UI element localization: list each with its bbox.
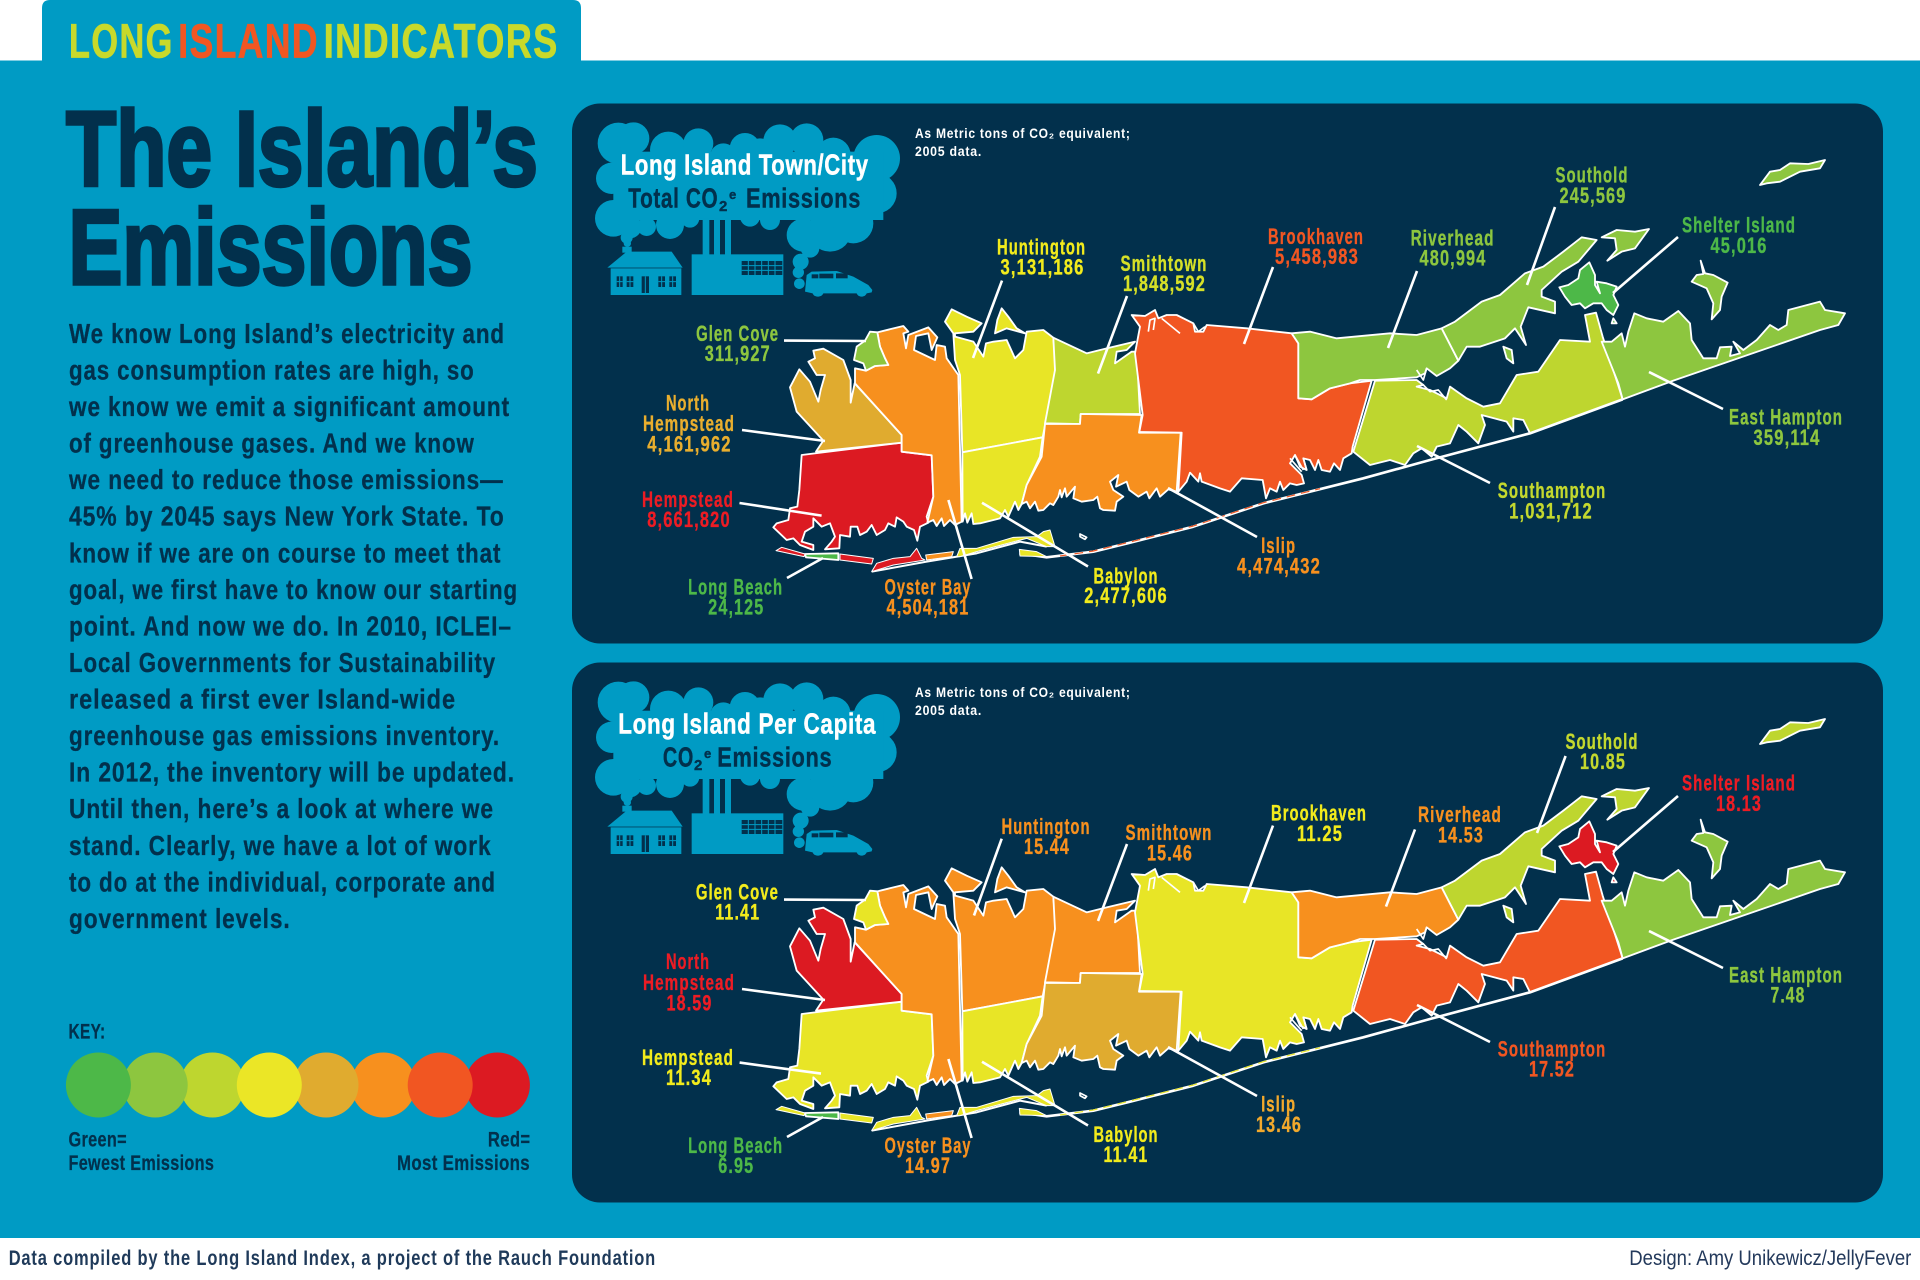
region: East Hampton bbox=[1602, 820, 1845, 958]
label: Long Beach bbox=[688, 1117, 823, 1178]
label: Hempstead: Hempstead bbox=[642, 1045, 734, 1070]
label: Hempstead bbox=[642, 1045, 821, 1090]
key: Fewest Emissions bbox=[68, 1151, 214, 1175]
label: Long Beach: 6.95 bbox=[718, 1153, 754, 1178]
label: Southold bbox=[1537, 729, 1638, 833]
label: Riverhead bbox=[1388, 226, 1495, 348]
label: Glen Cove: Glen Cove bbox=[696, 321, 779, 346]
data note bbox=[915, 125, 1131, 159]
panel: total emissions bbox=[572, 104, 1883, 644]
label: Brookhaven: Brookhaven bbox=[1271, 800, 1367, 826]
region: Hempstead bbox=[773, 443, 933, 550]
data note: 2005 data. bbox=[915, 702, 982, 718]
region: Riverhead bbox=[1292, 887, 1458, 958]
label: Brookhaven: 5,458,983 bbox=[1275, 244, 1359, 269]
label: Huntington: 3,131,186 bbox=[1000, 255, 1084, 280]
label: Riverhead: 480,994 bbox=[1420, 246, 1486, 271]
region: Hempstead bbox=[773, 1002, 933, 1109]
key: Green= bbox=[68, 1128, 127, 1152]
label: Smithtown bbox=[1098, 251, 1208, 374]
label: North Hempstead: 4,161,962 bbox=[647, 432, 732, 456]
body text: to do at the individual, corporate and bbox=[69, 866, 496, 897]
region: Southampton bbox=[1353, 872, 1623, 1024]
masthead: Long Island Indicators bbox=[69, 16, 559, 68]
label: North Hempstead bbox=[643, 390, 825, 456]
source credit: Data compiled by the Long Island Index, a project of the Rauch Foundation bbox=[9, 1247, 656, 1270]
label: Southold: 245,569 bbox=[1560, 183, 1626, 208]
region: Brookhaven bbox=[1132, 310, 1372, 498]
label: North Hempstead: 18.59 bbox=[666, 990, 712, 1016]
body text: know if we are on course to meet that bbox=[69, 537, 501, 568]
label: Shelter Island: Shelter Island bbox=[1682, 770, 1796, 796]
label: Oyster Bay: Oyster Bay bbox=[884, 574, 972, 600]
label: Islip bbox=[1168, 1047, 1302, 1137]
region: Glen Cove bbox=[854, 332, 888, 371]
data note: As Metric tons of CO₂ equivalent; bbox=[915, 125, 1131, 141]
label: North Hempstead: Hempstead bbox=[643, 411, 735, 436]
cloud heading: Long Island Per Capita: Emissions bbox=[717, 742, 832, 773]
label: Brookhaven bbox=[1244, 224, 1364, 344]
masthead: Long Island Indicators: INDICATORS bbox=[324, 16, 559, 68]
map: per capita emissions by town bbox=[773, 719, 1845, 1131]
label: Southampton: 1,031,712 bbox=[1509, 498, 1593, 523]
body text: released a first ever Island-wide bbox=[69, 684, 456, 714]
cloud heading: Long Island Per Capita: CO bbox=[663, 742, 694, 773]
label: Long Beach: 24,125 bbox=[708, 594, 764, 620]
region: Babylon bbox=[962, 437, 1043, 524]
label: Glen Cove: 311,927 bbox=[705, 341, 771, 366]
body text: gas consumption rates are high, so bbox=[69, 354, 475, 386]
label: Islip: Islip bbox=[1261, 533, 1296, 558]
label: Southampton: 17.52 bbox=[1529, 1057, 1575, 1082]
body text: of greenhouse gases. And we know bbox=[69, 428, 475, 459]
label: Southampton: Southampton bbox=[1498, 1037, 1606, 1062]
region: Babylon bbox=[962, 996, 1043, 1083]
region: Riverhead bbox=[1292, 328, 1458, 399]
region: East Hampton bbox=[1602, 261, 1845, 399]
label: North Hempstead: North bbox=[666, 390, 710, 415]
body text: In 2012, the inventory will be updated. bbox=[69, 757, 515, 788]
cloud heading: Long Island Town/City: Long Island Town/City bbox=[621, 149, 869, 181]
masthead: Long Island Indicators: LONG bbox=[69, 16, 174, 68]
label: East Hampton: 7.48 bbox=[1770, 983, 1806, 1008]
label: Riverhead bbox=[1386, 802, 1502, 907]
region: North Hempstead bbox=[790, 349, 902, 452]
cloud heading: Long Island Per Capita bbox=[618, 708, 876, 774]
label: Smithtown: 1,848,592 bbox=[1123, 271, 1206, 296]
label: North Hempstead: North bbox=[666, 949, 710, 974]
title: The Island’s bbox=[66, 88, 538, 208]
cloud heading: Long Island Town/City: 2 bbox=[719, 198, 728, 215]
title: Emissions bbox=[68, 187, 472, 307]
region: Islip bbox=[1022, 414, 1181, 511]
label: Southold bbox=[1527, 162, 1628, 285]
label: East Hampton bbox=[1649, 372, 1843, 450]
cloud heading: Long Island Town/City: Emissions bbox=[746, 183, 861, 214]
label: Long Beach: Long Beach bbox=[688, 1133, 783, 1158]
label: Smithtown: 15.46 bbox=[1147, 840, 1193, 865]
cloud heading: Long Island Per Capita: e bbox=[704, 746, 712, 761]
label: Shelter Island: Shelter Island bbox=[1682, 213, 1796, 238]
label: Southold: Southold bbox=[1556, 162, 1628, 187]
header tab bbox=[42, 0, 581, 61]
region: Glen Cove bbox=[854, 891, 888, 930]
key: Red= bbox=[488, 1128, 530, 1152]
label: Babylon: 11.41 bbox=[1104, 1142, 1148, 1167]
region: Huntington bbox=[945, 867, 1056, 1011]
icon: smoke cloud, house, factory and car bbox=[595, 681, 900, 856]
region: Huntington bbox=[945, 308, 1056, 452]
body text bbox=[68, 318, 518, 934]
label: Oyster Bay bbox=[884, 1059, 972, 1178]
data note: 2005 data. bbox=[915, 143, 982, 159]
label: Huntington bbox=[974, 814, 1090, 916]
label: Babylon: Babylon bbox=[1094, 1122, 1158, 1147]
label: Oyster Bay bbox=[884, 500, 972, 620]
label: Shelter Island: 45,016 bbox=[1710, 233, 1768, 258]
label: East Hampton: 359,114 bbox=[1754, 425, 1820, 450]
label: Babylon: Babylon bbox=[1094, 563, 1158, 588]
region: Oyster Bay bbox=[855, 885, 962, 1085]
region: Southold bbox=[1442, 160, 1825, 363]
body text: we need to reduce those emissions— bbox=[68, 464, 504, 495]
label: Southold: 10.85 bbox=[1580, 749, 1626, 774]
label: Riverhead: Riverhead bbox=[1411, 226, 1495, 251]
cloud heading: Long Island Per Capita: Long Island Per Capita bbox=[618, 708, 876, 740]
region: Shelter Island bbox=[1559, 262, 1618, 323]
label: Glen Cove: 11.41 bbox=[715, 900, 760, 925]
label: Southampton: Southampton bbox=[1498, 478, 1606, 503]
region: Smithtown bbox=[1045, 338, 1140, 424]
label: Hempstead bbox=[642, 487, 822, 532]
label: Smithtown: Smithtown bbox=[1120, 251, 1208, 276]
label: Smithtown: Smithtown bbox=[1126, 820, 1212, 845]
label: Glen Cove bbox=[696, 321, 866, 366]
label: Islip: 13.46 bbox=[1256, 1112, 1302, 1137]
region: North Hempstead bbox=[790, 908, 902, 1011]
cloud heading: Long Island Town/City: e bbox=[729, 187, 737, 202]
label: East Hampton: East Hampton bbox=[1729, 404, 1843, 429]
cloud heading: Long Island Town/City: Total CO bbox=[628, 183, 718, 214]
label: East Hampton: East Hampton bbox=[1729, 963, 1843, 988]
body text: we know we emit a significant amount bbox=[68, 391, 510, 422]
barrier beach outline bbox=[872, 877, 1623, 1131]
label: Riverhead: 14.53 bbox=[1438, 822, 1484, 848]
label: Islip: 4,474,432 bbox=[1237, 554, 1321, 578]
label: Shelter Island: 18.13 bbox=[1716, 791, 1762, 816]
cloud heading: Long Island Town/City bbox=[621, 149, 869, 215]
barrier beach: Hempstead and town strips bbox=[776, 489, 1320, 572]
label: Huntington: Huntington bbox=[997, 235, 1086, 260]
label: Babylon bbox=[982, 1062, 1158, 1167]
map: total emissions by town bbox=[773, 160, 1845, 572]
label: Hempstead: 11.34 bbox=[666, 1065, 712, 1090]
region: Long Beach bbox=[805, 1112, 838, 1119]
region: Smithtown bbox=[1045, 897, 1140, 983]
panel: per capita emissions bbox=[572, 662, 1883, 1202]
body text: goal, we first have to know our starting bbox=[69, 574, 518, 605]
body text: stand. Clearly, we have a lot of work bbox=[69, 830, 492, 861]
label: Long Beach bbox=[688, 558, 823, 620]
label: Brookhaven bbox=[1244, 800, 1367, 903]
label: Huntington: Huntington bbox=[1002, 814, 1090, 839]
label: Oyster Bay: Oyster Bay bbox=[884, 1133, 972, 1158]
region: Southampton bbox=[1353, 313, 1623, 465]
region: Oyster Bay bbox=[855, 326, 962, 526]
label: Oyster Bay: 4,504,181 bbox=[886, 594, 970, 620]
body text: We know Long Island’s electricity and bbox=[69, 318, 505, 349]
label: Huntington bbox=[973, 235, 1086, 358]
region: Southold bbox=[1442, 719, 1825, 922]
label: Islip bbox=[1168, 488, 1321, 578]
label: Riverhead: Riverhead bbox=[1418, 802, 1502, 827]
label: Shelter Island bbox=[1613, 213, 1796, 293]
key: Most Emissions bbox=[397, 1151, 530, 1175]
label: North Hempstead bbox=[643, 949, 825, 1016]
masthead: Long Island Indicators: ISLAND bbox=[178, 16, 319, 68]
label: Huntington: 15.44 bbox=[1024, 834, 1070, 859]
body text: Local Governments for Sustainability bbox=[69, 647, 496, 678]
label: Hempstead: Hempstead bbox=[642, 487, 734, 512]
key: KEY: bbox=[68, 1019, 106, 1043]
body text: government levels. bbox=[69, 903, 291, 934]
label: Babylon: 2,477,606 bbox=[1084, 583, 1168, 608]
barrier beach: town strips bbox=[776, 1048, 1320, 1131]
icon: smoke cloud, house, factory and car bbox=[595, 122, 900, 297]
label: Hempstead: 8,661,820 bbox=[647, 507, 731, 532]
data note bbox=[915, 684, 1131, 718]
label: Smithtown bbox=[1098, 820, 1212, 921]
region: Brookhaven bbox=[1132, 869, 1372, 1057]
body text: greenhouse gas emissions inventory. bbox=[69, 720, 500, 751]
region: Islip bbox=[1022, 973, 1181, 1070]
region: Long Beach bbox=[805, 553, 838, 560]
label: Glen Cove: Glen Cove bbox=[696, 879, 779, 904]
data note: As Metric tons of CO₂ equivalent; bbox=[915, 684, 1131, 700]
label: Glen Cove bbox=[696, 879, 866, 925]
body text: Until then, here’s a look at where we bbox=[69, 793, 494, 824]
label: North Hempstead: Hempstead bbox=[643, 970, 735, 995]
region: Shelter Island bbox=[1559, 821, 1618, 882]
label: Southampton bbox=[1417, 1005, 1606, 1082]
label: Southampton bbox=[1417, 446, 1606, 523]
label: Islip: Islip bbox=[1261, 1092, 1296, 1116]
title bbox=[66, 88, 538, 307]
body text: point. And now we do. In 2010, ICLEI– bbox=[69, 610, 512, 641]
label: Long Beach: Long Beach bbox=[688, 574, 783, 600]
key bbox=[66, 1019, 530, 1175]
label: Brookhaven: Brookhaven bbox=[1268, 224, 1364, 249]
label: Brookhaven: 11.25 bbox=[1297, 821, 1343, 846]
label: Oyster Bay: 14.97 bbox=[905, 1153, 951, 1178]
cloud heading: Long Island Per Capita: 2 bbox=[694, 757, 703, 774]
label: Shelter Island bbox=[1613, 770, 1796, 852]
label: East Hampton bbox=[1649, 931, 1843, 1008]
label: Southold: Southold bbox=[1566, 729, 1638, 754]
body text: 45% by 2045 says New York State. To bbox=[69, 501, 505, 532]
barrier beach outline bbox=[872, 318, 1623, 572]
label: Babylon bbox=[982, 503, 1168, 608]
